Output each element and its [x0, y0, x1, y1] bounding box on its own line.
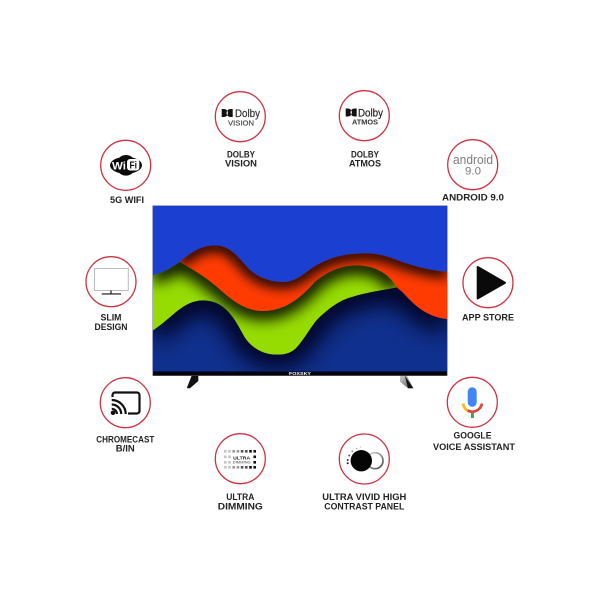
icon: android: android: [453, 152, 493, 167]
icon: play triangle: [478, 267, 505, 298]
icon: dolby atmos: Dolby: [358, 108, 383, 120]
icon: dolby vision: VISION: [228, 120, 254, 127]
label: DOLBY: [351, 149, 379, 159]
label: B/IN: [116, 443, 135, 453]
label: ANDROID 9.0: [442, 192, 504, 202]
feature: Slim design: [86, 257, 136, 332]
label: CONTRAST PANEL: [324, 501, 405, 511]
feature: Dolby Atmos: [339, 91, 389, 169]
TV stand left: [187, 376, 198, 388]
feature: App store: [462, 258, 514, 323]
green wave: [153, 260, 406, 360]
icon: dolby atmos: [346, 108, 383, 127]
label: DESIGN: [94, 322, 128, 332]
label: [96, 434, 155, 453]
icon: android: 9.0: [465, 165, 481, 177]
label: CHROMECAST: [96, 434, 155, 444]
icon: contrast circles: [347, 446, 383, 471]
label: VISION: [225, 159, 257, 169]
TV brand: FOXSKY: [289, 371, 311, 376]
red wave: [177, 243, 450, 323]
label: [218, 492, 263, 511]
TV screen artwork: [153, 206, 450, 373]
label: ATMOS: [349, 159, 381, 169]
icon: android: [453, 152, 493, 177]
label: [433, 430, 516, 452]
feature: Android 9.0: [442, 140, 504, 202]
feature: Chromecast: [96, 378, 155, 453]
icon: monitor: [94, 268, 128, 295]
feature: Dolby Vision: [215, 92, 265, 169]
TV stand right: [400, 376, 413, 388]
label: ULTRA VIVID HIGH: [322, 492, 406, 502]
icon: wifi: Fi: [130, 161, 137, 172]
label: [349, 149, 381, 169]
icon: dot grid: ULTRA: [233, 455, 251, 460]
label: DIMMING: [218, 501, 263, 511]
icon: dolby atmos: ATMOS: [352, 120, 378, 127]
icon: dolby vision: [222, 108, 260, 127]
label: VOICE ASSISTANT: [433, 442, 516, 452]
label: SLIM: [100, 313, 122, 323]
icon: wifi: [110, 155, 142, 176]
label: [225, 149, 257, 169]
icon: microphone: [463, 387, 482, 418]
label: ULTRA: [226, 492, 255, 502]
blue sky: [153, 206, 447, 371]
label: GOOGLE: [454, 430, 492, 440]
label: [94, 313, 128, 332]
label: 5G WIFI: [110, 195, 144, 205]
label: APP STORE: [462, 313, 514, 323]
icon: wifi: Wi: [112, 160, 126, 172]
icon: dolby vision: Dolby: [235, 108, 260, 120]
label: DOLBY: [227, 149, 255, 159]
icon: dot grid: [224, 450, 256, 469]
feature: Google voice assistant: [433, 377, 516, 452]
feature: Ultra dimming: [215, 434, 265, 511]
icon: cast: [112, 392, 140, 414]
label: [322, 492, 406, 511]
feature: 5G WiFi: [101, 140, 151, 205]
feature: Ultra vivid contrast: [322, 434, 406, 511]
TV: [153, 206, 450, 388]
TV bezel: [153, 206, 447, 376]
navy wave: [152, 288, 448, 372]
icon: dot grid: DIMMING: [233, 461, 251, 465]
